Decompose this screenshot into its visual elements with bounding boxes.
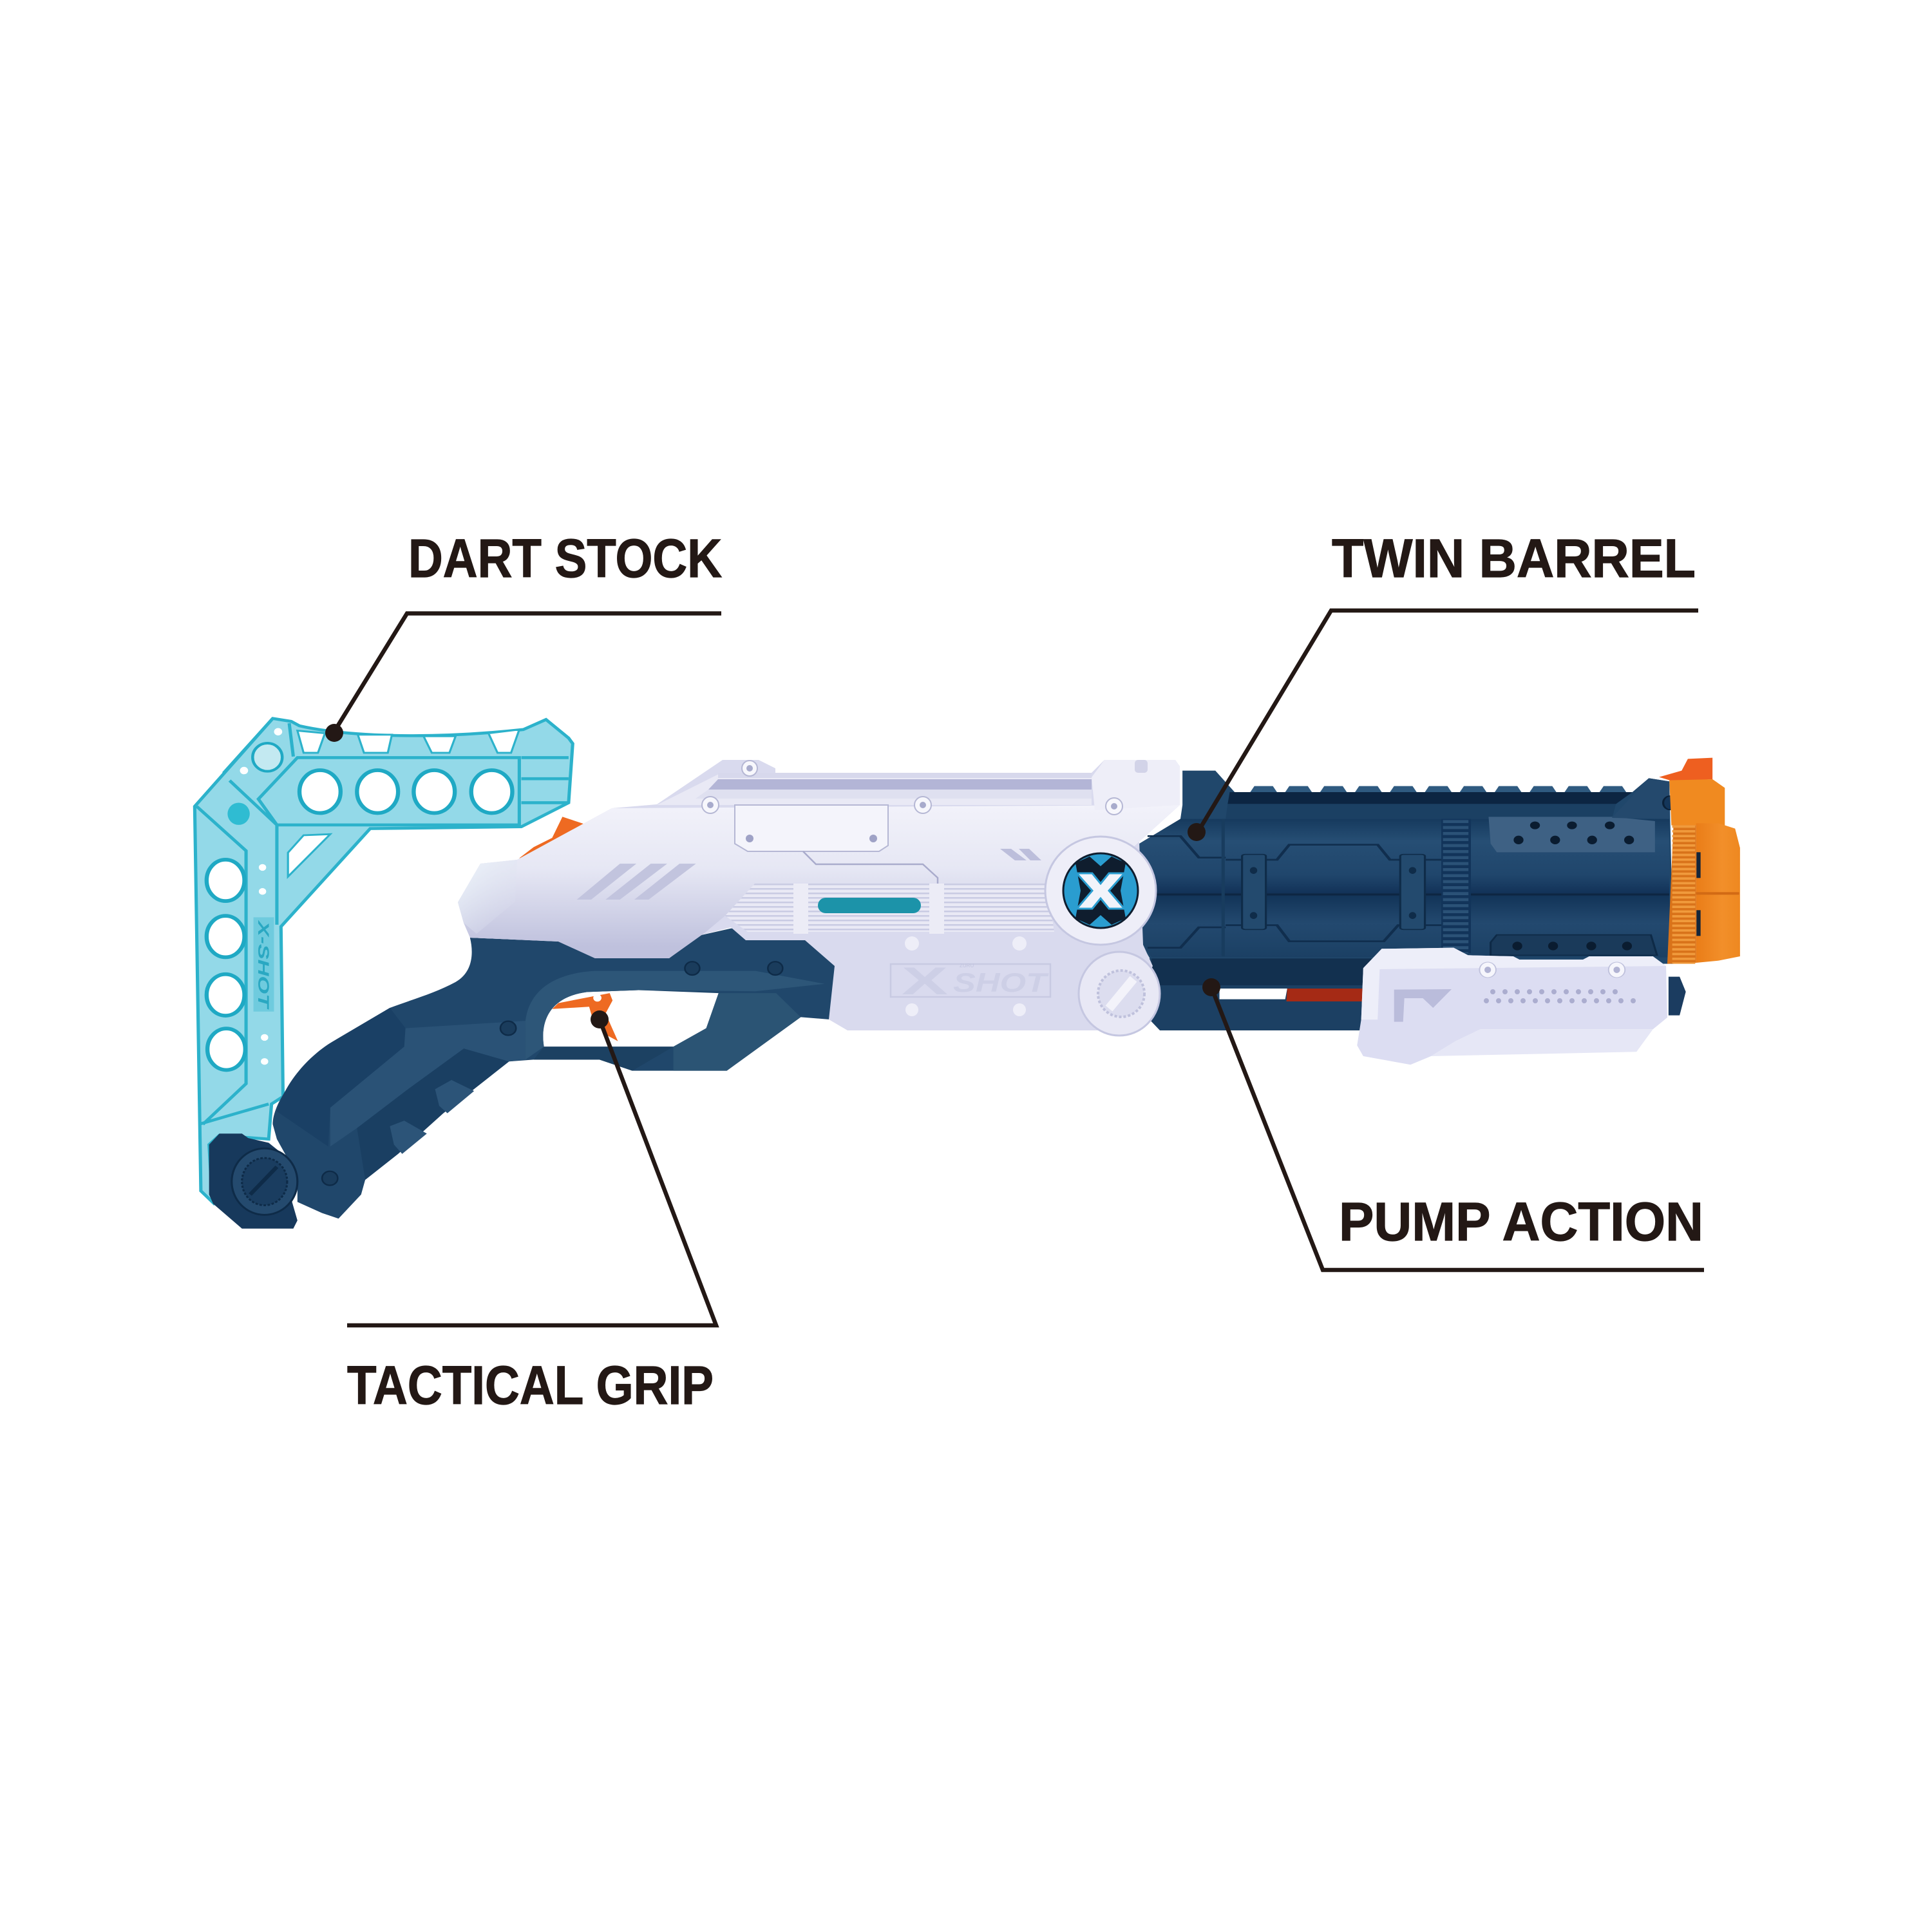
trigger — [552, 993, 618, 1041]
embossed X-Shot logo — [891, 960, 1050, 1003]
orange priming handle — [519, 817, 589, 858]
twin barrel — [1139, 771, 1677, 964]
callout: twin barrel — [1188, 528, 1698, 841]
pump tube with slot — [1148, 958, 1382, 1030]
orange muzzle — [1659, 758, 1740, 964]
callout: pump action — [1202, 978, 1704, 1270]
body screws — [702, 761, 1122, 815]
X logo badge — [1045, 837, 1156, 945]
label: pump action: PUMP ACTION — [1339, 1191, 1703, 1252]
sight plate — [735, 805, 888, 851]
embossed X-Shot logo: X — [902, 960, 948, 1003]
dart stock — [194, 719, 573, 1202]
callout: tactical grip — [347, 1010, 716, 1416]
teal slot — [818, 898, 921, 913]
label: tactical grip: TACTICAL GRIP — [347, 1355, 714, 1416]
ribbed panel — [725, 884, 1054, 932]
stock hinge base — [209, 1133, 298, 1229]
embossed X-Shot logo: ZURU — [960, 963, 974, 969]
blaster product illustration — [194, 719, 1740, 1229]
double chevrons — [1000, 849, 1041, 860]
embossed X-Shot logo: SHOT — [953, 967, 1049, 998]
pump grip — [1357, 948, 1686, 1065]
main receiver body — [458, 760, 1180, 1030]
label: twin barrel: TWIN BARREL — [1332, 528, 1696, 589]
pistol grip and trigger frame — [273, 929, 846, 1218]
lower dial — [1079, 952, 1160, 1036]
callout: dart stock — [325, 528, 722, 742]
label: dart stock: DART STOCK — [408, 528, 722, 589]
triple chevrons — [577, 864, 696, 900]
dart stock: X-SHOT — [255, 919, 272, 1010]
